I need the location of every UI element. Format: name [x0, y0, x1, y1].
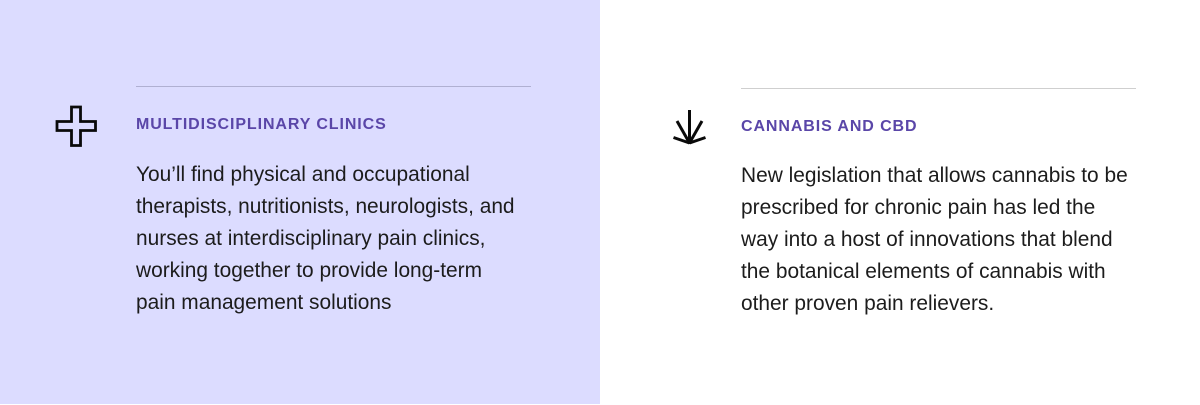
text block: cannabis description	[741, 164, 1128, 315]
icon: medical cross	[56, 106, 97, 147]
text block: clinics description: nurses at interdisciplinary pain clinics,	[136, 227, 486, 250]
text block: cannabis description: New legislation that allows cannabis to be	[741, 164, 1128, 187]
panel: multidisciplinary clinics	[0, 0, 600, 404]
text block: cannabis description: way into a host of innovations that blend	[741, 228, 1113, 251]
text block: cannabis description: prescribed for chronic pain has led the	[741, 196, 1095, 219]
heading: cannabis and CBD: CANNABIS AND CBD	[741, 118, 917, 135]
text block: cannabis description: other proven pain relievers.	[741, 292, 994, 315]
text block: clinics description: working together to provide long-term	[136, 259, 482, 282]
text block: clinics description	[136, 163, 515, 314]
text block: cannabis description: the botanical elements of cannabis with	[741, 260, 1106, 283]
icon: cannabis leaf	[673, 110, 706, 144]
panel: cannabis and CBD	[600, 0, 1200, 405]
text block: clinics description: therapists, nutritionists, neurologists, and	[136, 195, 515, 218]
heading: multidisciplinary clinics: MULTIDISCIPLINARY CLINICS	[136, 116, 387, 133]
text block: clinics description: pain management solutions	[136, 291, 392, 314]
text block: clinics description: You’ll find physical and occupational	[136, 163, 470, 186]
